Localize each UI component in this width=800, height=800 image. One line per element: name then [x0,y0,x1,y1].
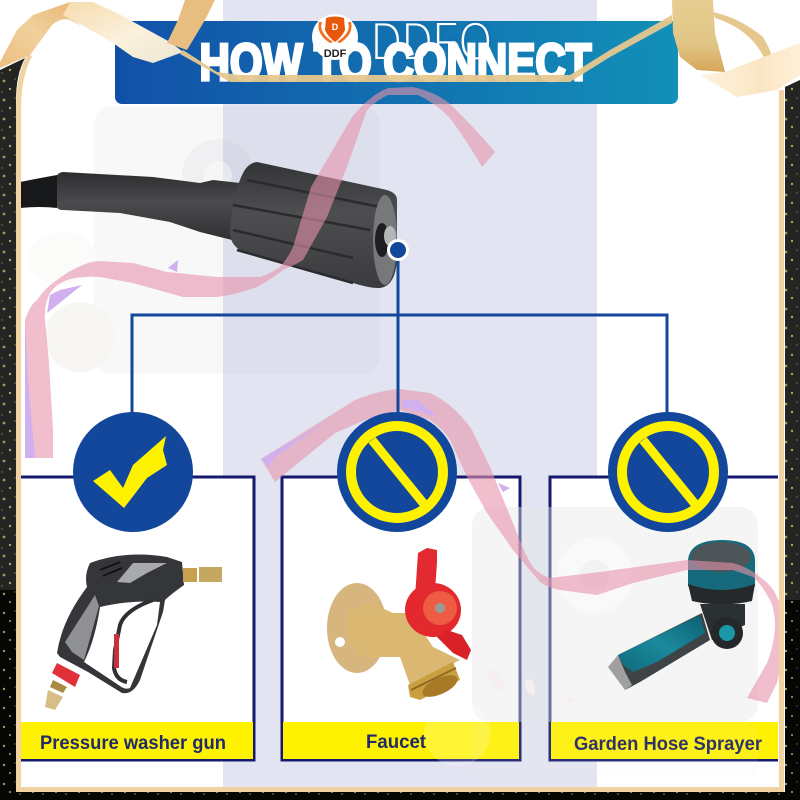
decorative pink ribbon: middle and right [261,389,783,703]
sprayer prohibited badge [608,412,728,532]
panel outline [282,477,520,760]
sprayer label: Garden Hose Sprayer [574,734,763,755]
faint flower decoration [28,232,115,372]
faucet prohibited badge [337,412,457,532]
brand logo [312,14,358,60]
label band [283,722,519,759]
panel: pressure washer gun [21,477,254,760]
brand name: DDFO [371,10,492,72]
decorative pink ribbon: left and top [25,87,495,458]
faucet label: Faucet [366,732,427,753]
decorative gold ribbon: top [0,0,800,97]
faint product watermark: top [94,106,380,374]
check badge [73,412,193,532]
label band [551,722,778,759]
label text: Pressure washer gun [40,733,226,754]
hose with connector [20,162,397,288]
panel: garden hose sprayer [550,477,778,760]
title: HOW TO CONNECT [200,34,592,92]
icon: brass faucet [327,548,471,701]
label band [21,722,253,759]
panel: faucet [282,477,520,760]
icon: hose sprayer [608,540,755,690]
brand logo: D [332,22,339,32]
panel outline [21,477,254,760]
icon: pressure washer gun [45,555,222,710]
connector dot [388,240,408,260]
header banner [115,21,678,104]
faint product watermark: bottom [424,507,758,777]
panel outline [550,477,778,760]
brand logo: DDF [324,48,347,60]
connector lines [132,255,667,420]
